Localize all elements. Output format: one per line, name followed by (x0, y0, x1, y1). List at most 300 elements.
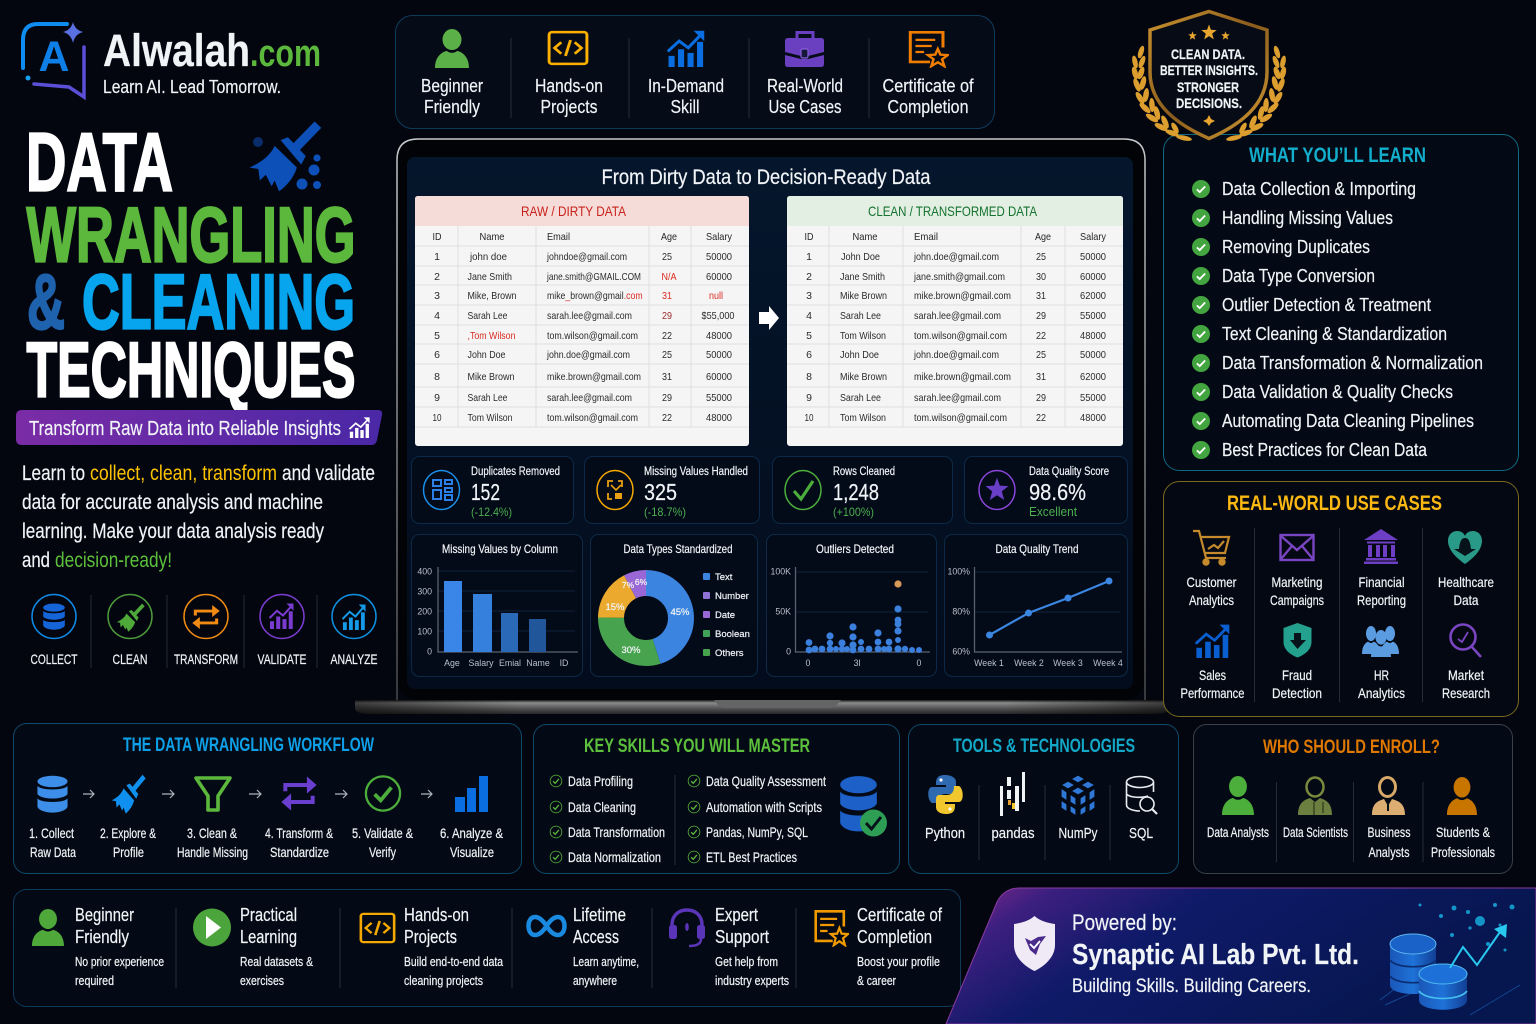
icon: transform (184, 594, 228, 638)
text: expert support: Get help from (715, 955, 778, 969)
raw table column headers (432, 231, 733, 243)
skills list left: Data Normalization (568, 849, 661, 865)
clean row 2: Jane Smith (840, 271, 885, 283)
powered by label: Powered by: (1072, 910, 1177, 935)
raw row 1: 25 (662, 251, 672, 263)
chart title: Missing Values by Column (442, 542, 558, 556)
clean row 5: tom.wilson@gmail.com (914, 330, 1007, 342)
icon: database with check (840, 776, 887, 836)
donut legend: Text (715, 572, 733, 583)
learn list: Handling Missing Values (1222, 208, 1393, 228)
arrow (249, 790, 261, 798)
clean row 4: 29 (1036, 310, 1046, 322)
clean row 9: 10 (804, 412, 814, 424)
raw row 1: 50000 (706, 251, 732, 263)
label: students and professionals: Students & (1436, 824, 1491, 840)
label: certificate of completion (882, 76, 974, 117)
step 6 label (440, 825, 504, 860)
label: validate: VALIDATE (258, 651, 306, 667)
logo: Alwalah.com (23, 22, 321, 97)
icon: code (549, 32, 587, 64)
intro paragraph: and validate (282, 462, 375, 485)
icon: funnel (196, 778, 230, 810)
raw table column headers: Age (661, 231, 677, 243)
icon: missing values (597, 470, 633, 510)
laptop base (355, 700, 1170, 714)
label: business analysts (1368, 824, 1410, 860)
clean row 2: jane.smith@gmail.com (913, 271, 1005, 283)
label: pandas: pandas (992, 825, 1034, 842)
raw row 3: mike_brown@gmail.com (547, 290, 643, 302)
stat change: (-18.7%) (644, 505, 686, 519)
raw table column headers: Name (480, 231, 505, 243)
icon: market magnifier (1450, 624, 1481, 657)
quality badge (1131, 12, 1287, 142)
bar chart (444, 581, 546, 652)
clean row 8: 55000 (1080, 392, 1106, 404)
clean row 2 (806, 271, 1106, 283)
raw row 2: 60000 (706, 271, 732, 283)
text: practical learning: Learning (240, 927, 297, 947)
title line: CLEANING: CLEANING (82, 258, 355, 346)
label: hands-on projects: Hands-on (535, 76, 603, 96)
stat change: (-12.4%) (471, 505, 512, 519)
raw row 9: 48000 (706, 412, 732, 424)
label: healthcare data (1438, 574, 1494, 608)
y axis labels: 100 (417, 626, 432, 636)
skills list right: Automation with Scripts (706, 799, 822, 815)
intro paragraph: decision-ready! (55, 549, 172, 572)
raw row 4: Sarah Lee (468, 310, 508, 322)
clean row 4: sarah.lee@gmail.com (914, 310, 1001, 322)
stat value: 98.6% (1029, 479, 1086, 505)
badge text (1160, 46, 1258, 111)
heading: TOOLS & TECHNOLOGIES (953, 736, 1135, 757)
raw row 8 (434, 392, 732, 404)
label: HR analytics: HR (1374, 667, 1389, 683)
clean table column headers: Age (1035, 231, 1051, 243)
x axis labels: 3l (854, 658, 860, 668)
icon: in-demand chart (668, 31, 704, 67)
y axis labels: 100K (770, 566, 791, 576)
clean row 1 (806, 251, 1106, 263)
stat card: missing values handled (584, 456, 760, 524)
y axis labels: 0 (427, 646, 432, 656)
raw row 6: john.doe@gmail.com (546, 349, 630, 361)
icon: beginner person (435, 29, 469, 68)
text: certificate of completion: Completion (857, 927, 932, 947)
raw row 1: john doe (469, 251, 507, 263)
raw row 2: jane.smith@GMAIL.COM (546, 271, 641, 283)
clean row 3: mike.brown@gmail.com (914, 290, 1011, 302)
step 5 label: 5. Validate & (352, 825, 414, 841)
donut labels: 7% (622, 580, 635, 590)
raw table column headers: Email (547, 231, 570, 243)
panel: tools and technologies (908, 724, 1178, 874)
learn list: Data Type Conversion (1222, 266, 1375, 286)
clean row 3 (806, 290, 1106, 302)
label: in-demand skill (648, 76, 724, 117)
chart title: Outliers Detected (816, 542, 894, 556)
label: real-world use cases: Real-World (767, 76, 843, 96)
raw row 5: 5 (434, 330, 440, 342)
y axis labels: 200 (417, 606, 432, 616)
text: expert support: industry experts (715, 974, 789, 988)
text: expert support: Support (715, 927, 769, 947)
chart card: data quality trend (944, 534, 1128, 676)
skills list right: ETL Best Practices (706, 849, 797, 865)
clean row 4: 55000 (1080, 310, 1106, 322)
icon: duplicates (424, 470, 460, 510)
text: hands-on projects: Hands-on (404, 905, 469, 925)
text: beginner friendly: required (75, 974, 114, 988)
raw row 7: 8 (434, 371, 440, 383)
company tagline: Building Skills. Building Careers. (1072, 976, 1311, 997)
raw row 4: sarah.lee@gmail.com (547, 310, 632, 322)
donut labels: 15% (605, 602, 625, 613)
icon: briefcase (785, 32, 824, 67)
clean row 9: 22 (1036, 412, 1046, 424)
raw row 9 (432, 412, 732, 424)
donut labels: 45% (670, 607, 690, 618)
clean row 6: 6 (806, 349, 812, 361)
arrow (83, 790, 94, 798)
clean row 8: sarah.lee@gmail.com (914, 392, 1001, 404)
x axis labels: Name (526, 658, 550, 668)
step 6 label: 6. Analyze & (440, 825, 504, 841)
text: certificate of completion: Certificate of (857, 905, 943, 925)
clean row 1: john.doe@gmail.com (913, 251, 999, 263)
clean table column headers: Name (852, 231, 878, 243)
icon: pandas (1000, 772, 1025, 816)
label: customer analytics: Customer (1186, 574, 1237, 590)
label: customer analytics (1186, 574, 1237, 608)
skills list left (550, 773, 665, 865)
skills list right: Data Quality Assessment (706, 773, 826, 789)
icon: envelope (1280, 535, 1314, 560)
raw row 3: 3 (434, 290, 440, 302)
raw row 8: 9 (434, 392, 440, 404)
heading: REAL-WORLD USE CASES (1227, 492, 1442, 515)
text: certificate of completion: Boost your profile (857, 955, 940, 969)
raw row 5: 48000 (706, 330, 732, 342)
label: sales performance (1180, 667, 1245, 701)
label: fraud detection: Detection (1272, 685, 1322, 701)
label: healthcare data: Data (1454, 592, 1479, 608)
stat card: rows cleaned (772, 456, 952, 524)
label: hands-on projects (535, 76, 603, 117)
icon: database (37, 776, 68, 813)
raw row 2: 2 (434, 271, 440, 283)
x axis labels: Age (444, 658, 460, 668)
label: in-demand skill: In-Demand (648, 76, 724, 96)
icon: fraud shield (1284, 623, 1312, 658)
clean row 7: 8 (806, 371, 812, 383)
icon: certificate (816, 911, 848, 945)
panel: what you'll learn (1164, 134, 1518, 470)
label: collect: COLLECT (30, 651, 78, 667)
company name: Synaptic AI Lab Pvt. Ltd. (1072, 939, 1359, 971)
clean table heading: CLEAN / TRANSFORMED DATA (868, 203, 1038, 219)
graphic: databases with growth arrow (1380, 903, 1520, 1015)
icon: data scientist (1298, 778, 1332, 815)
x axis labels (806, 658, 922, 668)
learn list (1192, 179, 1483, 460)
icon: sales chart (1196, 625, 1229, 658)
text: practical learning (240, 905, 314, 988)
stat value: 1,248 (833, 479, 879, 505)
clean transformed data table (787, 196, 1123, 446)
stat title: Data Quality Score (1029, 466, 1109, 478)
raw row 1: johndoe@gmail.com (546, 251, 627, 263)
skills list right (688, 773, 826, 865)
title line: DATA: DATA (26, 116, 173, 208)
title line: TECHNIQUES: TECHNIQUES (26, 326, 356, 414)
donut chart (611, 583, 681, 653)
text: hands-on projects: cleaning projects (404, 974, 483, 988)
clean row 4 (806, 310, 1106, 322)
label: sales performance: Performance (1180, 685, 1245, 701)
label: healthcare data: Healthcare (1438, 574, 1494, 590)
title ampersand: & (27, 258, 65, 346)
x axis labels: Salary (469, 658, 494, 668)
label: business analysts: Business (1368, 824, 1410, 840)
x axis labels: Week 4 (1093, 658, 1123, 668)
clean row 5: 5 (806, 330, 812, 342)
clean row 7 (806, 371, 1106, 383)
text: lifetime access: Access (573, 927, 619, 947)
label: marketing campaigns: Campaigns (1270, 592, 1324, 608)
x axis labels: ID (560, 658, 568, 668)
raw row 6: 50000 (706, 349, 732, 361)
icon: student (1447, 777, 1477, 815)
heading: WHAT YOU’LL LEARN (1249, 144, 1426, 167)
clean row 7: 31 (1036, 371, 1046, 383)
text: beginner friendly: Beginner (75, 905, 134, 925)
text: lifetime access: anywhere (573, 974, 617, 988)
label: HR analytics: Analytics (1358, 685, 1405, 701)
y axis labels: 50K (775, 606, 791, 616)
icon: business analyst (1372, 778, 1405, 815)
text: expert support (715, 905, 789, 988)
panel: who should enroll (1194, 724, 1512, 874)
label: students and professionals: Professionals (1431, 844, 1495, 860)
icon: shield logo (1014, 916, 1055, 971)
y axis labels (770, 566, 791, 656)
stat title: Duplicates Removed (471, 466, 560, 478)
raw row 4 (434, 310, 735, 322)
icon: check (785, 470, 821, 510)
x axis labels: Week 3 (1053, 658, 1083, 668)
clean row 8: 9 (806, 392, 812, 404)
raw row 9: Tom Wilson (468, 412, 513, 424)
icon: headset (669, 910, 705, 946)
growth arrow (1450, 924, 1507, 968)
step 4 label: 4. Transform & (265, 825, 333, 841)
icon: speech bubble logo (23, 22, 84, 97)
raw row 3: 31 (662, 290, 672, 302)
laptop frame and screen (397, 139, 1145, 700)
icon: data analyst (1222, 776, 1254, 815)
learn list: Automating Data Cleaning Pipelines (1222, 411, 1474, 431)
step 3 label (177, 825, 248, 860)
badge text: DECISIONS. (1176, 95, 1242, 111)
icon: insights chart (349, 417, 370, 438)
icon: stars (1188, 24, 1230, 126)
raw row 6 (434, 349, 732, 361)
clean row 2: 60000 (1080, 271, 1106, 283)
icon: transform arrows (281, 776, 317, 811)
text: hands-on projects (404, 905, 503, 988)
icon: infinity (528, 917, 564, 935)
raw row 7: 31 (662, 371, 672, 383)
icon: code (361, 914, 394, 942)
text: practical learning: exercises (240, 974, 284, 988)
skills list left: Data Transformation (568, 824, 665, 840)
process icons row (30, 594, 378, 668)
icon: cart (1193, 531, 1229, 565)
icon: broom (112, 775, 146, 814)
intro paragraph: collect, clean, transform (90, 462, 277, 485)
y axis labels (417, 566, 432, 656)
clean row 1: John Doe (841, 251, 880, 263)
clean row 5 (806, 330, 1106, 342)
panel: real-world use cases (1164, 482, 1518, 716)
heading: THE DATA WRANGLING WORKFLOW (123, 735, 374, 756)
raw table column headers: Salary (706, 231, 733, 243)
y axis labels: 60% (952, 646, 970, 656)
x axis labels (974, 658, 1123, 668)
text: practical learning: Practical (240, 905, 297, 925)
y axis labels: 0 (786, 646, 791, 656)
scatter plot (806, 580, 922, 653)
step 1 label (29, 825, 76, 860)
title line: WRANGLING: WRANGLING (26, 190, 356, 278)
raw row 1 (434, 251, 732, 263)
stat value: 152 (471, 479, 500, 505)
arrow (335, 790, 347, 798)
raw row 8: sarah.lee@gmail.com (547, 392, 632, 404)
raw row 9: 10 (432, 412, 442, 424)
step 2 label: Profile (113, 844, 144, 860)
panel: data wrangling workflow (14, 724, 522, 874)
raw row 7: mike.brown@gmail.com (547, 371, 641, 383)
badge text: STRONGER (1177, 79, 1239, 95)
icon: certificate (910, 32, 948, 66)
x axis labels (444, 658, 568, 668)
intro paragraph: data for accurate analysis and machine (22, 491, 323, 514)
learn list: Data Collection & Importing (1222, 179, 1416, 199)
clean row 6: 50000 (1080, 349, 1106, 361)
arrow (421, 790, 432, 798)
screen heading: From Dirty Data to Decision-Ready Data (602, 166, 931, 189)
step 1 label: 1. Collect (29, 825, 74, 841)
clean row 9: 48000 (1080, 412, 1106, 424)
heading: KEY SKILLS YOU WILL MASTER (584, 736, 810, 757)
step 5 label (352, 825, 414, 860)
step 3 label: 3. Clean & (187, 825, 238, 841)
raw row 1: 1 (434, 251, 440, 263)
clean row 6: John Doe (840, 349, 879, 361)
label: in-demand skill: Skill (670, 97, 700, 117)
learn list: Outlier Detection & Treatment (1222, 295, 1431, 315)
raw row 2 (434, 271, 732, 283)
label: numpy: NumPy (1058, 825, 1098, 842)
chart title: Data Quality Trend (996, 542, 1078, 556)
clean row 3: 62000 (1080, 290, 1106, 302)
text: lifetime access: Learn anytime, (573, 955, 639, 969)
icon: python (928, 775, 963, 814)
clean row 5: Tom Wilson (840, 330, 886, 342)
raw row 9: 22 (662, 412, 672, 424)
shield (1150, 12, 1267, 138)
raw row 6: John Doe (468, 349, 506, 361)
label: sales performance: Sales (1199, 667, 1226, 683)
clean row 3: 31 (1036, 290, 1046, 302)
arrow: raw to clean (759, 306, 779, 330)
step 4 label (265, 825, 333, 860)
label: data scientists: Data Scientists (1283, 825, 1348, 840)
raw row 9: tom.wilson@gmail.com (547, 412, 638, 424)
label: market research: Research (1442, 685, 1490, 701)
text: lifetime access (573, 905, 639, 988)
stat title: Missing Values Handled (644, 466, 748, 478)
badge text: CLEAN DATA. (1171, 46, 1245, 62)
label: customer analytics: Analytics (1189, 592, 1234, 608)
clean row 6 (806, 349, 1106, 361)
raw row 4: 4 (434, 310, 440, 322)
clean row 1: 1 (806, 251, 812, 263)
clean row 9: Tom Wilson (840, 412, 886, 424)
clean row 8: 29 (1036, 392, 1046, 404)
intro paragraph: Learn to (22, 462, 85, 485)
stat value: 325 (644, 479, 677, 505)
intro paragraph (22, 462, 375, 572)
raw row 7 (434, 371, 732, 383)
stat card: duplicates removed (412, 456, 574, 524)
label: market research (1442, 667, 1490, 701)
step 1 label: Raw Data (30, 844, 76, 860)
raw row 8: 55000 (706, 392, 732, 404)
label: certificate of completion: Completion (888, 97, 968, 117)
raw row 3: Mike, Brown (468, 290, 517, 302)
heading: WHO SHOULD ENROLL? (1263, 737, 1440, 758)
label: clean: CLEAN (112, 651, 148, 667)
label: market research: Market (1448, 667, 1484, 683)
clean table column headers: Salary (1080, 231, 1107, 243)
clean row 4: Sarah Lee (840, 310, 881, 322)
raw row 4: $55,000 (702, 310, 735, 322)
arrow (162, 790, 174, 798)
label: financial reporting: Reporting (1357, 592, 1406, 608)
text: expert support: Expert (715, 905, 758, 925)
label: fraud detection: Fraud (1282, 667, 1312, 683)
raw row 6: 6 (434, 349, 440, 361)
clean row 6: 25 (1036, 349, 1046, 361)
raw table column headers: ID (432, 231, 442, 243)
x axis labels: 0 (917, 658, 922, 668)
icon: healthcare heart (1448, 531, 1482, 564)
raw row 5 (434, 330, 732, 342)
label: sql: SQL (1129, 825, 1153, 842)
chart card: outliers detected (766, 534, 936, 676)
y axis labels: 100% (948, 566, 970, 576)
raw row 6: 25 (662, 349, 672, 361)
icon: broom (249, 121, 321, 191)
icon: analyze (332, 594, 376, 638)
learn list: Data Validation & Quality Checks (1222, 382, 1453, 402)
icon: play (193, 908, 231, 946)
